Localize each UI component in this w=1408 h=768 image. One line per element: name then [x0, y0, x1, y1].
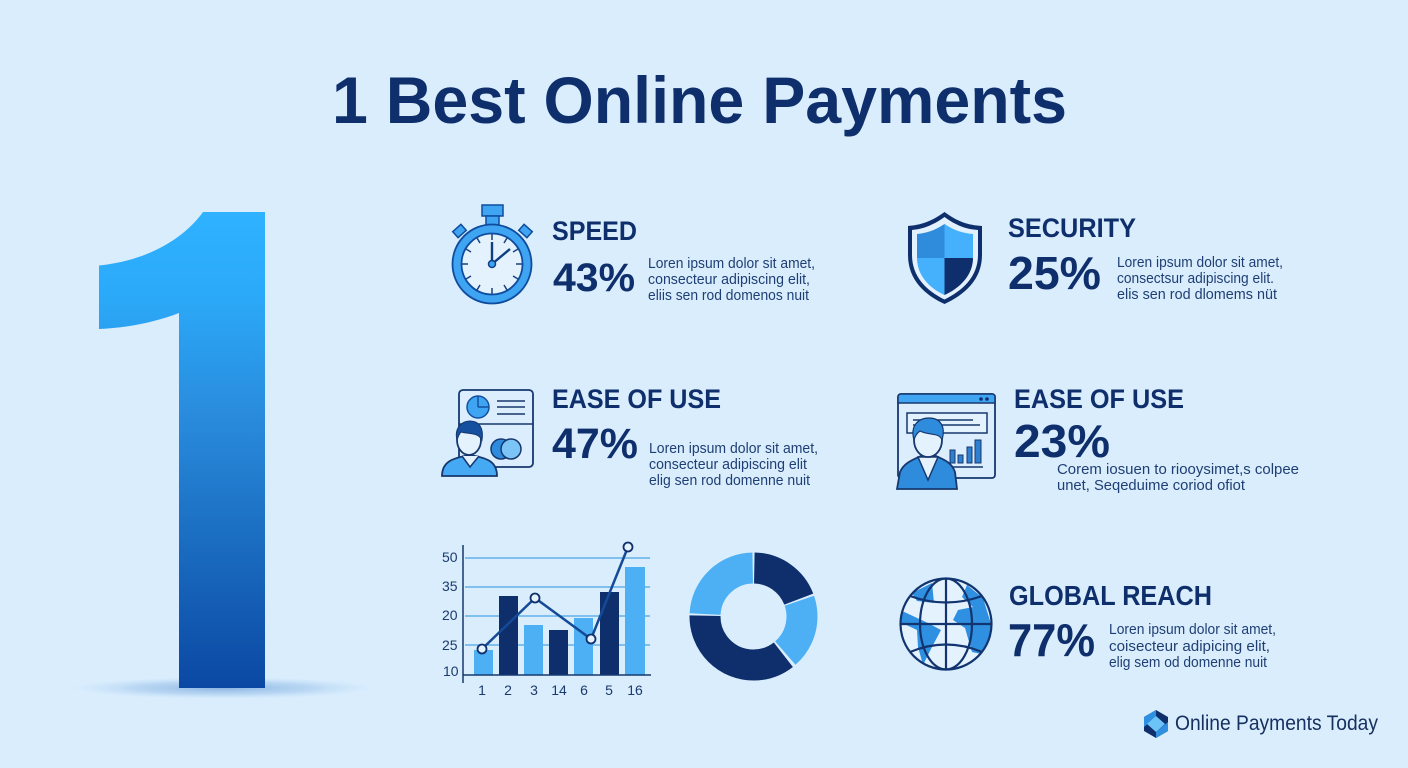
- title: 1 Best Online Payments: [332, 63, 1067, 137]
- stat: 77%: 77%: [1008, 614, 1095, 666]
- icon: user with dashboard: [442, 390, 533, 476]
- x axis labels: 2: [504, 682, 512, 698]
- stat: 25%: 25%: [1008, 247, 1101, 299]
- large numeral one: [71, 212, 375, 699]
- x axis labels: 5: [605, 682, 613, 698]
- icon: globe: [900, 578, 992, 670]
- icon: stopwatch: [452, 205, 532, 304]
- brand name: Online Payments Today: [1175, 712, 1378, 735]
- text block: global reach description: elig sem od domenne nuit: [1109, 655, 1267, 671]
- heading: security: SECURITY: [1008, 213, 1136, 243]
- trend line: [478, 542, 632, 654]
- y axis labels: 50: [442, 549, 458, 565]
- text block: speed description: [648, 256, 815, 304]
- text block: ease of use left description: Loren ipsum dolor sit amet,: [649, 441, 818, 457]
- text block: global reach description: [1109, 622, 1276, 671]
- x axis labels: 16: [627, 682, 643, 698]
- text block: global reach description: coisecteur adipicing elit,: [1109, 639, 1270, 655]
- text block: speed description: eliis sen rod domenos nuit: [648, 288, 809, 304]
- x axis labels: 1: [478, 682, 486, 698]
- x axis labels: [478, 682, 643, 698]
- heading: speed: SPEED: [552, 216, 637, 246]
- stat: 47%: 47%: [552, 420, 638, 468]
- y axis labels: 10: [443, 663, 459, 679]
- panel: global reach: [900, 578, 1276, 671]
- text block: ease of use right description: unet, Seqeduime coriod ofiot: [1057, 478, 1245, 494]
- panel: speed: [452, 205, 815, 304]
- icon: shield: [908, 212, 982, 304]
- stat: 23%: 23%: [1014, 415, 1110, 467]
- bar and line chart: [442, 542, 651, 698]
- y axis labels: [442, 549, 459, 679]
- text block: security description: consectsur adipiscing elit.: [1117, 271, 1274, 287]
- text block: speed description: Loren ipsum dolor sit amet,: [648, 256, 815, 272]
- x axis labels: 6: [580, 682, 588, 698]
- text block: global reach description: Loren ipsum dolor sit amet,: [1109, 622, 1276, 638]
- text block: security description: elis sen rod dlomems nüt: [1117, 287, 1277, 303]
- bars: [474, 567, 645, 675]
- heading: ease of use right: EASE OF USE: [1014, 384, 1184, 414]
- y axis labels: 25: [442, 637, 458, 653]
- text block: ease of use left description: [649, 441, 818, 489]
- icon: hexagon cube: [1144, 710, 1168, 738]
- panel: ease of use left: [442, 384, 818, 489]
- text block: security description: Loren ipsum dolor sit amet,: [1117, 255, 1283, 271]
- icon: user with browser window: [897, 394, 995, 489]
- logo: online payments today: [1144, 710, 1378, 738]
- y axis labels: 20: [442, 607, 458, 623]
- panel: security: [908, 212, 1283, 304]
- heading: global reach: GLOBAL REACH: [1009, 580, 1212, 611]
- y axis labels: 35: [442, 578, 458, 594]
- donut chart: [705, 568, 802, 665]
- stat: 43%: 43%: [553, 256, 635, 300]
- x axis labels: 14: [551, 682, 567, 698]
- text block: ease of use right description: [1057, 462, 1299, 494]
- x axis labels: 3: [530, 682, 538, 698]
- heading: ease of use left: EASE OF USE: [552, 384, 721, 414]
- text block: ease of use left description: elig sen rod domenne nuit: [649, 473, 810, 489]
- text block: security description: [1117, 255, 1283, 303]
- text block: ease of use right description: Corem iosuen to riooysimet,s colpee: [1057, 462, 1299, 478]
- text block: speed description: consecteur adipiscing elit,: [648, 272, 810, 288]
- text block: ease of use left description: consecteur adipiscing elit: [649, 457, 807, 473]
- panel: ease of use right: [897, 384, 1299, 494]
